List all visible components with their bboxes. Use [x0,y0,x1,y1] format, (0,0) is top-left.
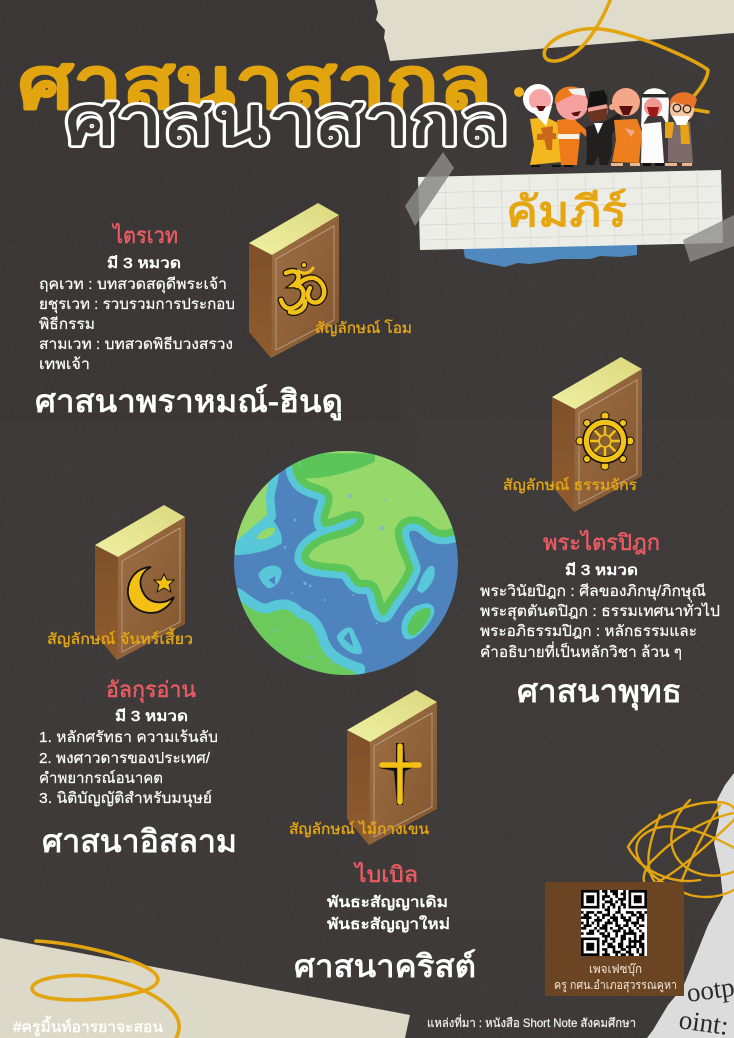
islands [258,566,435,654]
scribble bottom right [628,800,734,897]
qr code [581,890,647,956]
religion name: ศาสนาคริสต์ [294,949,476,984]
body text: พิธีกรรม [39,316,95,333]
illustration: six religious figures [514,84,697,167]
section: hinduism [35,223,343,420]
hashtag: #ครูมิ้นท์อารยาจะสอน [13,1016,163,1036]
tape right [683,215,734,262]
bottom land [237,588,365,675]
book: om [249,203,339,358]
scripture name: ไบเบิล [353,862,418,887]
squiggle top right [544,0,708,112]
label: crescent: สัญลักษณ์ จันทร์เสี้ยว [47,628,193,648]
title outlined white: ศาสนาสากล [65,83,509,159]
section: christianity [294,862,476,984]
religion name: ศาสนาอิสลาม [42,824,237,859]
body text: พระสุตตันตปิฎก : ธรรมเทศนาทั่วไป [480,600,720,621]
body text [327,894,450,933]
icon: om symbol [281,262,324,313]
title outlined white: ศาสนาสากล [65,83,509,159]
torn newspaper bottom right [647,773,734,1038]
figure: man with orange turban and glasses [665,92,697,166]
body text: ฤคเวท : บทสวดสดุดีพระเจ้า [39,276,227,294]
left land [234,473,282,555]
torn blue paper [463,245,637,267]
source credit: แหล่งที่มา : หนังสือ Short Note สังคมศึกษา [427,1014,636,1030]
body text: เทพเจ้า [39,356,90,373]
panel: qr code [545,882,684,996]
newspaper words [680,982,734,1035]
icon: cross [379,743,421,805]
body text: 3. นิติบัญญัติสำหรับมนุษย์ [39,790,212,808]
body text: คำพยากรณ์อนาคต [39,770,163,787]
body text [39,276,235,373]
note panel: คัมภีร์ [405,152,734,267]
label: dharma wheel: สัญลักษณ์ ธรรมจักร [503,477,637,494]
body text [39,729,218,808]
tape left [405,152,454,226]
icon: crescent and star [128,567,174,613]
body text: พันธะสัญญาใหม่ [327,915,450,933]
section: buddhism [480,530,720,711]
body text: พระอภิธรรมปิฎก : หลักธรรมและ [480,623,697,640]
body text: สามเวท : บทสวดพิธีบวงสรวง [39,336,233,353]
figure: sage in yellow robe [514,84,562,167]
main continent [296,440,472,612]
book: crescent [95,505,185,660]
torn paper top right [375,0,734,61]
body text: ยชุรเวท : รวบรวมการประกอบ [39,296,235,314]
body text: 1. หลักศรัทธา ความเร้นลับ [39,729,218,746]
label: cross: สัญลักษณ์ ไม้กางเขน [289,820,429,838]
body text [480,583,720,661]
qr caption: เพจเฟซบุ๊ก [589,962,642,977]
figure: man in black suit and hat [586,88,622,165]
subheading: มี 3 หมวด [107,255,181,272]
ocean [234,451,458,675]
squiggle bottom left [32,941,179,1038]
body text: พันธะสัญญาเดิม [327,894,448,911]
torn paper bottom left [0,938,410,1038]
label: om: สัญลักษณ์ โอม [315,319,412,337]
body text: พระวินัยปิฎก : ศีลของภิกษุ/ภิกษุณี [480,583,706,601]
grid note [418,170,723,250]
figure: orange robed man [555,86,590,167]
body text: คำอธิบายที่เป็นหลักวิชา ล้วน ๆ [480,641,682,661]
heading: คัมภีร์ [506,188,627,235]
figure: buddhist monk [609,88,642,166]
book: dharma wheel [552,357,642,512]
qr caption: ครู กศน.อำเภอสุวรรณคูหา [554,978,677,993]
scripture name: ไตรเวท [111,223,178,248]
globe [234,451,458,675]
title shadow yellow: ศาสนาสากล [18,44,492,124]
speckles [274,494,386,665]
qr caption [554,962,677,993]
book: cross [347,690,437,845]
body text: 2. พงศาวดารของประเทศ/ [39,750,211,767]
icon: dharma wheel [576,412,634,470]
religion name: ศาสนาพุทธ [517,674,682,711]
section: islam [39,677,237,859]
figure: man in white arabic robe [641,88,669,166]
subheading: มี 3 หมวด [565,562,638,579]
religion name: ศาสนาพราหมณ์-ฮินดู [35,384,343,420]
scripture name: อัลกุรอ่าน [106,677,196,703]
subheading: มี 3 หมวด [115,708,188,725]
scripture name: พระไตรปิฎก [543,530,660,555]
